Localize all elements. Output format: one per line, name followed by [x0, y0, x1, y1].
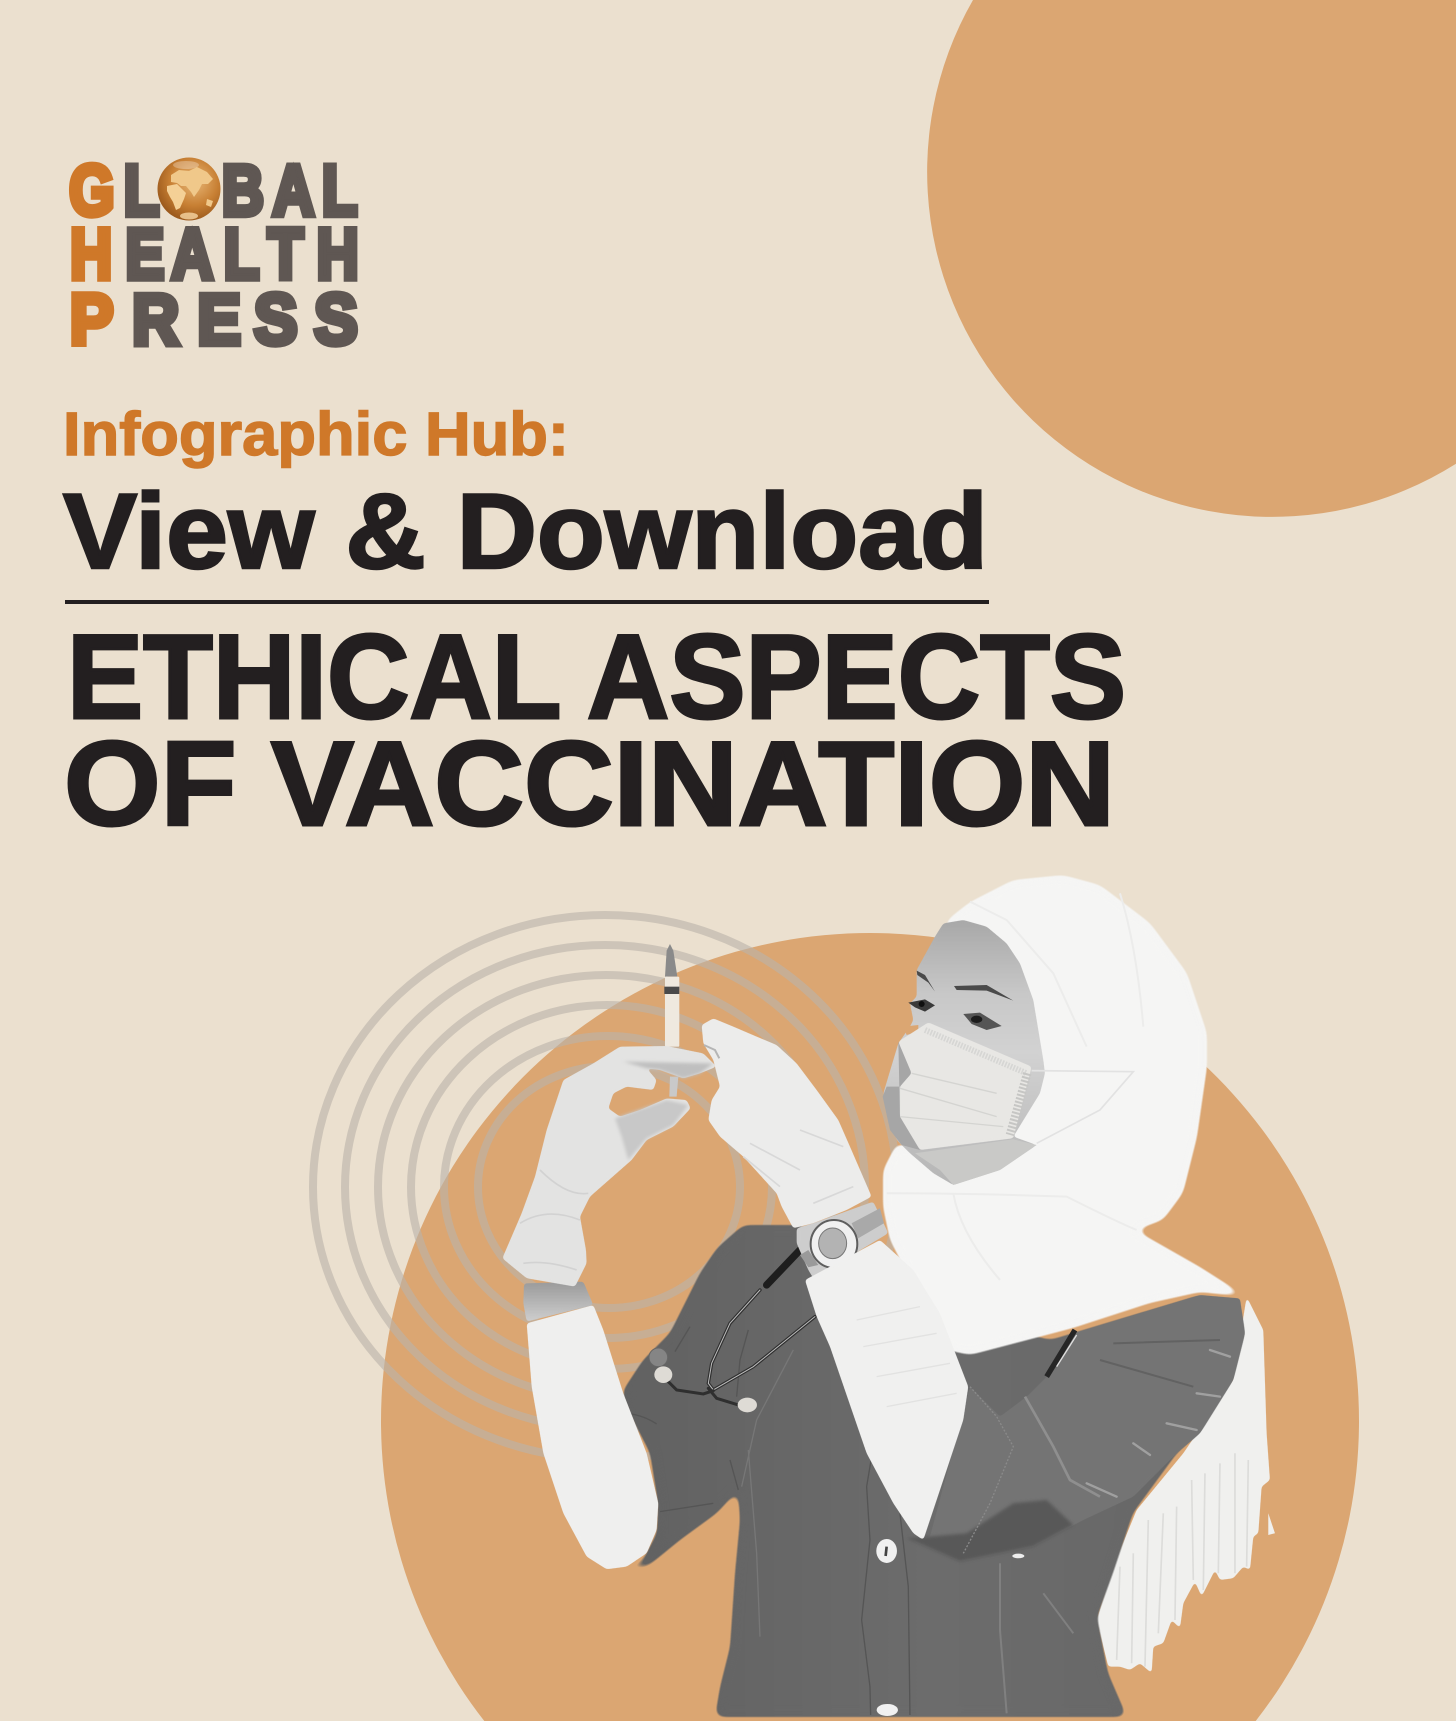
title	[64, 610, 1126, 851]
chin band	[915, 1139, 1037, 1185]
left forearm sleeve	[523, 1282, 658, 1569]
mask ear loop	[1032, 1071, 1133, 1143]
title: ETHICAL ASPECTS	[67, 610, 1126, 744]
mask side shadow	[883, 1042, 920, 1150]
placket seams	[627, 1327, 910, 1715]
eyebrows	[917, 971, 1013, 1001]
heading underline	[65, 600, 989, 604]
logo wordmark: G	[69, 150, 115, 230]
scrub details and stethoscope	[627, 1250, 910, 1716]
title: OF VACCINATION	[64, 717, 1115, 851]
face	[883, 920, 1045, 1185]
syringe	[664, 944, 679, 1097]
face mask	[898, 1022, 1032, 1150]
wrist and watch	[797, 1202, 888, 1278]
logo wordmark	[69, 150, 359, 360]
nurse illustration	[502, 875, 1275, 1717]
right forearm sleeve	[805, 1240, 968, 1540]
large orange circle behind nurse	[381, 933, 1359, 1721]
logo wordmark: P	[70, 281, 113, 360]
decorative circle top right	[927, 0, 1456, 517]
heading: View & Download: View & Download	[63, 471, 988, 591]
logo: Global Health Press	[69, 150, 359, 360]
scarf fringe	[1097, 1297, 1275, 1673]
logo wordmark: LOBAL	[124, 150, 357, 230]
concentric rings	[313, 915, 897, 1459]
right sleeve	[907, 1295, 1245, 1713]
orange gap above mask	[903, 1025, 918, 1035]
stethoscope tubing	[668, 1250, 815, 1405]
stethoscope ear tips	[654, 1366, 672, 1383]
mask pleats	[900, 1030, 1027, 1135]
right glove	[702, 1018, 872, 1228]
logo wordmark: H	[70, 214, 112, 294]
logo wordmark: EALTH	[125, 214, 359, 294]
head	[883, 893, 1143, 1280]
buttons	[876, 1539, 897, 1563]
logo wordmark: RESS	[132, 281, 358, 360]
hijab	[883, 875, 1247, 1355]
icon: globe	[158, 158, 220, 220]
left glove	[502, 1046, 717, 1287]
subtitle: Infographic Hub: Infographic Hub:	[63, 400, 569, 468]
eyes	[908, 999, 1002, 1030]
pocket button	[649, 1348, 668, 1367]
scrub top	[617, 1225, 1245, 1717]
hijab folds	[887, 893, 1143, 1280]
